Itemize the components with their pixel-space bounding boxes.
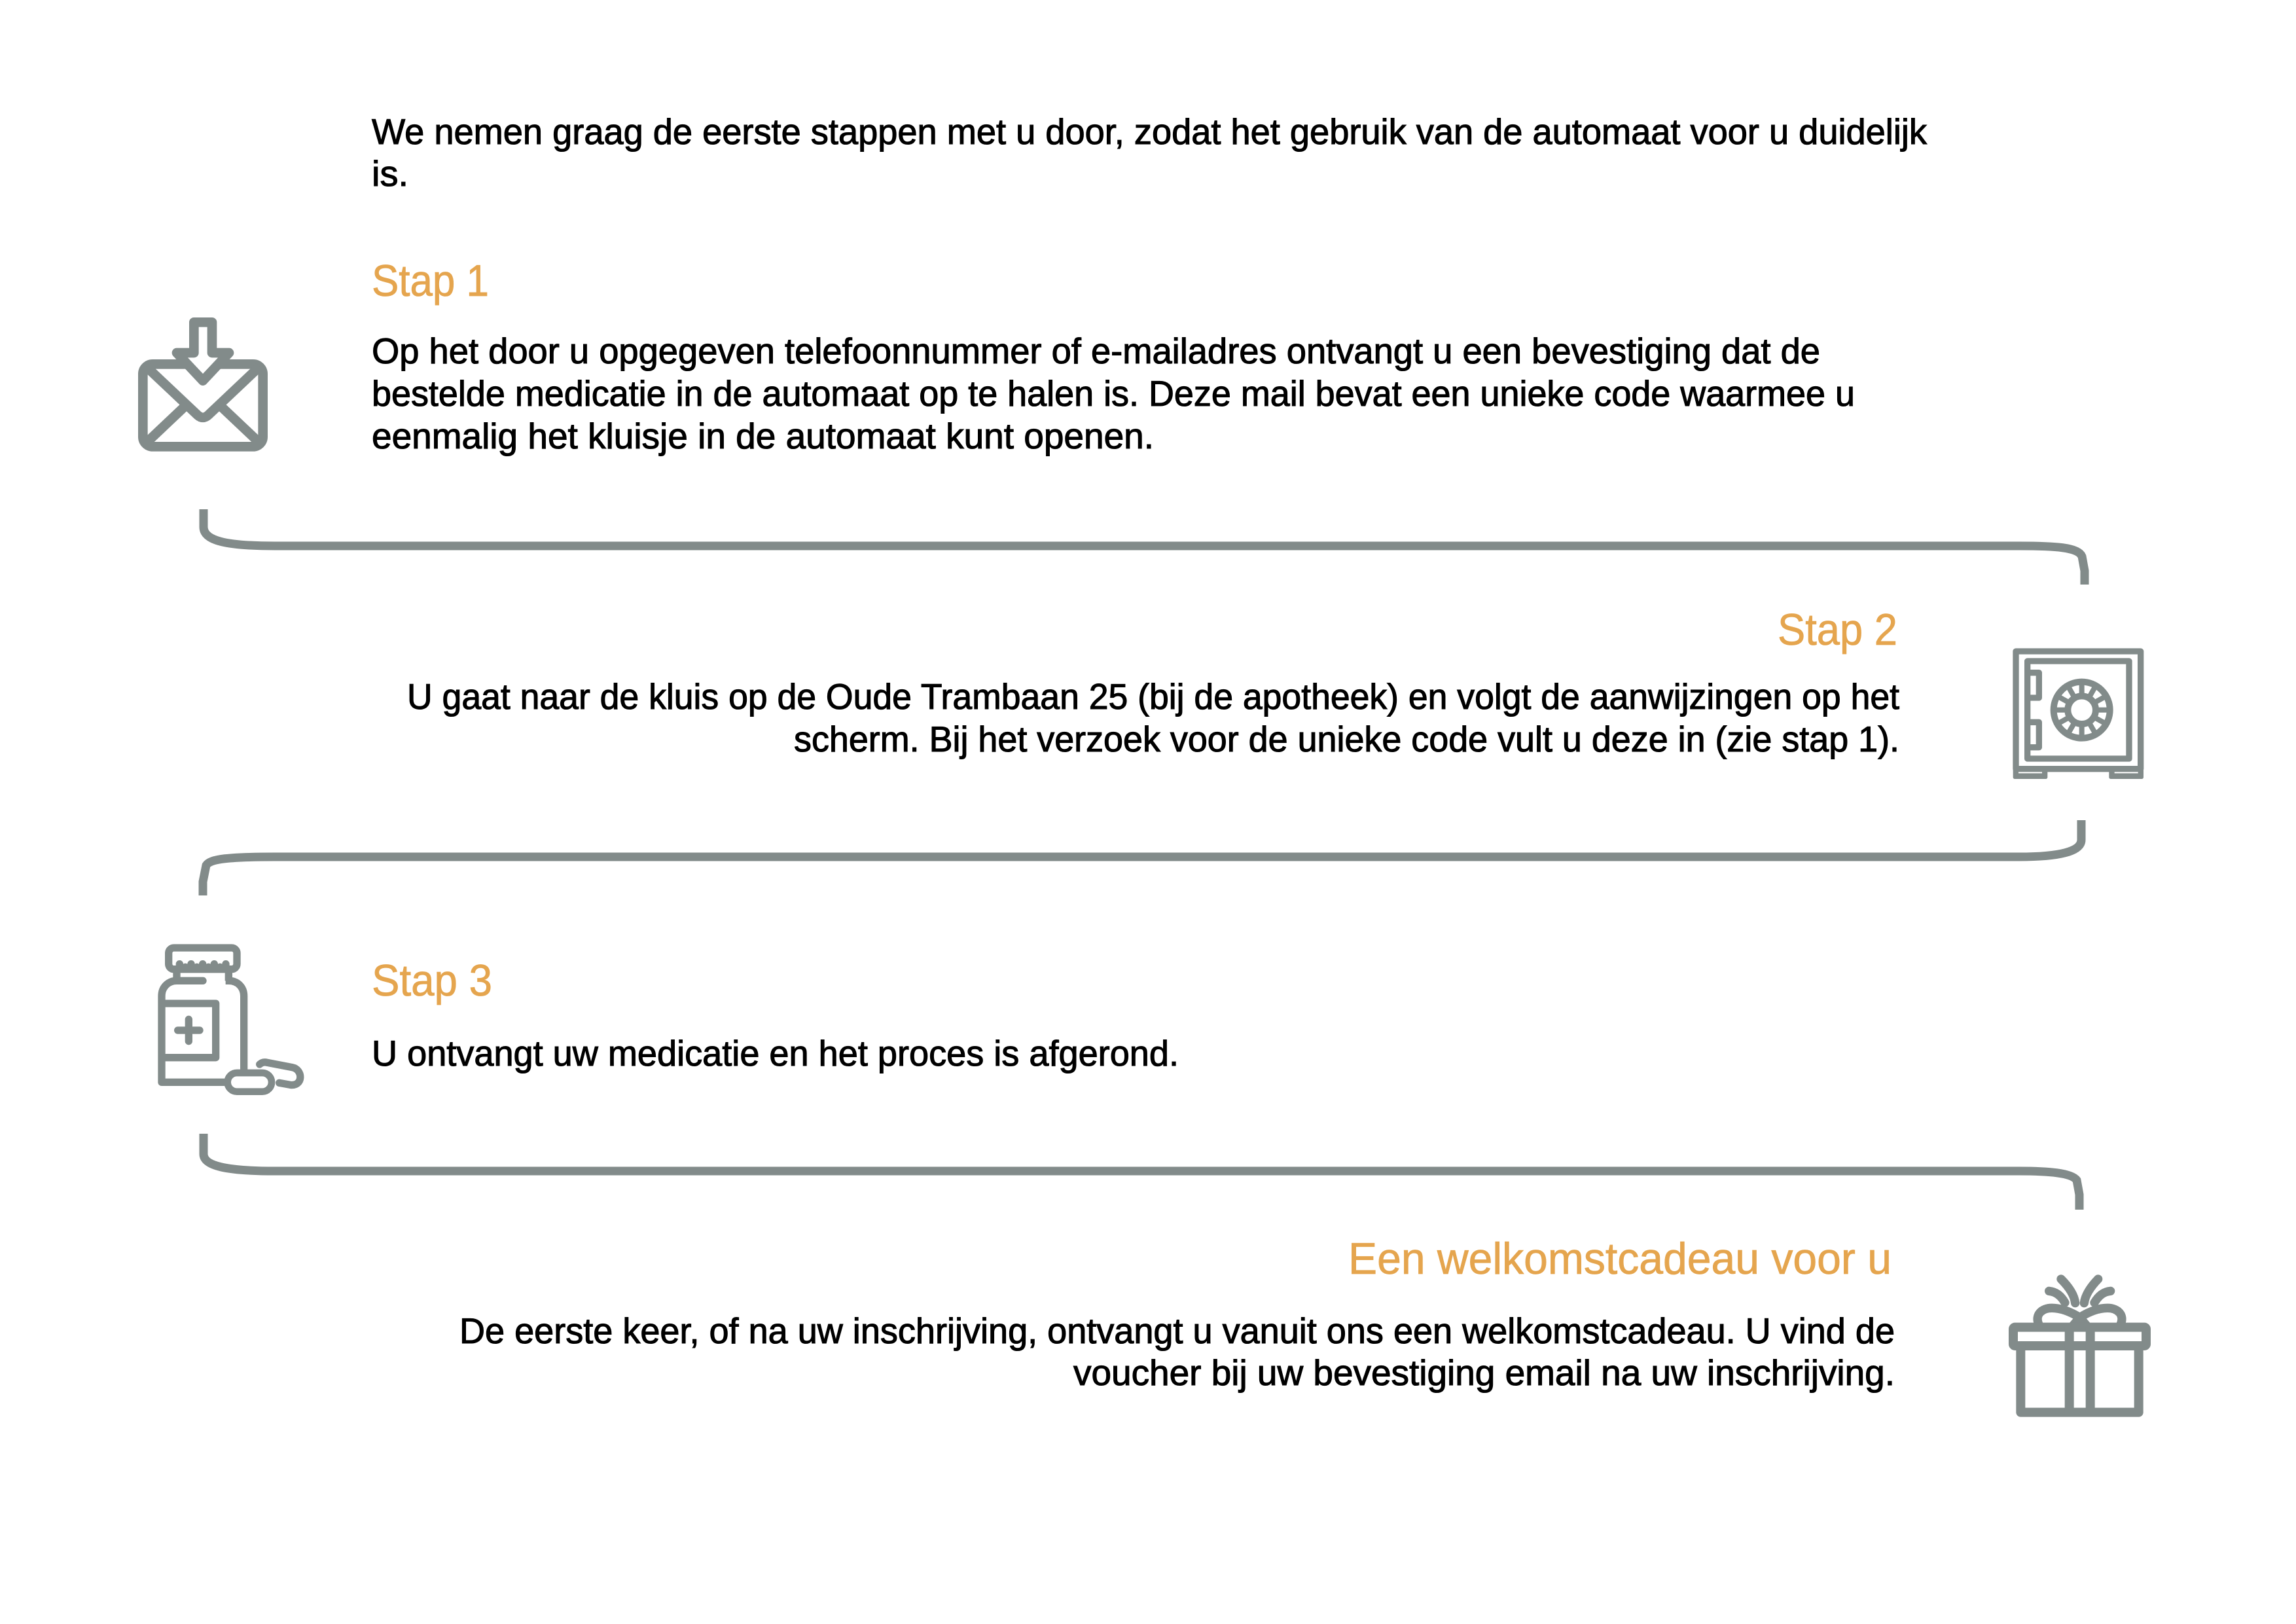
intro text: is. bbox=[372, 153, 408, 194]
text: step 2: U gaat naar de kluis op de Oude Trambaan 25 (bij de apotheek) en volgt de aanwijzingen op het bbox=[407, 676, 1899, 717]
intro text bbox=[372, 111, 1927, 194]
text: welcome gift: voucher bij uw bevestiging email na uw inschrijving. bbox=[1073, 1352, 1895, 1393]
heading: Stap 2: Stap 2 bbox=[1778, 605, 1897, 655]
intro text: We nemen graag de eerste stappen met u door, zodat het gebruik van de automaat voor u duidelijk bbox=[372, 111, 1927, 152]
text: step 1: eenmalig het kluisje in de automaat kunt openen. bbox=[372, 416, 1154, 456]
text: welcome gift: De eerste keer, of na uw inschrijving, ontvangt u vanuit ons een welkomstcadeau. U vind de bbox=[459, 1310, 1895, 1351]
icon: gift box bbox=[2013, 1279, 2146, 1413]
heading: welcome gift: Een welkomstcadeau voor u bbox=[1348, 1234, 1892, 1284]
icon: medicine bottle and pills bbox=[162, 948, 300, 1092]
connector: step 3 to gift bbox=[204, 1134, 2079, 1210]
text: step 1: bestelde medicatie in de automaat op te halen is. Deze mail bevat een unieke code waarmee u bbox=[372, 373, 1855, 414]
text: step 1 bbox=[372, 331, 1855, 456]
icon: safe bbox=[2013, 651, 2144, 779]
heading: Stap 3: Stap 3 bbox=[372, 956, 492, 1005]
text: welcome gift bbox=[459, 1310, 1895, 1393]
heading: Stap 1: Stap 1 bbox=[372, 256, 489, 306]
connector: step 1 to step 2 bbox=[204, 509, 2085, 585]
text: step 2 bbox=[407, 676, 1899, 759]
icon: envelope with arrow bbox=[143, 322, 263, 446]
text: step 3: U ontvangt uw medicatie en het proces is afgerond. bbox=[372, 1033, 1179, 1074]
text: step 2: scherm. Bij het verzoek voor de unieke code vult u deze in (zie stap 1). bbox=[794, 719, 1899, 759]
connector: step 2 to step 3 bbox=[203, 820, 2081, 895]
text: step 1: Op het door u opgegeven telefoonnummer of e-mailadres ontvangt u een bevestiging dat de bbox=[372, 331, 1820, 371]
